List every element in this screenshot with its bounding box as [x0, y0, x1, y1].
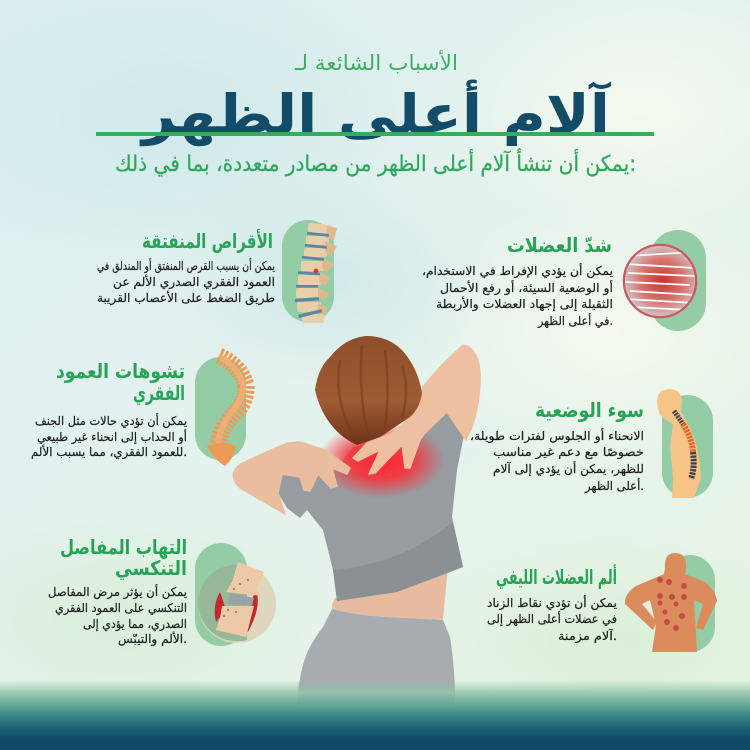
- heading: سوء الوضعية: [535, 398, 644, 422]
- icon: back with trigger points: [625, 553, 717, 652]
- heading: التنكسي: [115, 556, 187, 581]
- heading: التهاب المفاصل: [60, 535, 187, 559]
- body text: [487, 595, 617, 644]
- icon: posture figure: [657, 389, 701, 498]
- body text: الألم والتيبّس.: [118, 631, 187, 647]
- body text: خصوصًا مع دعم غير مناسب: [493, 445, 644, 460]
- body text: طريق الضغط على الأعصاب القريبة: [97, 290, 275, 306]
- body text: الثقيلة إلى إجهاد العضلات والأربطة: [436, 296, 613, 312]
- panel: poor posture: [470, 389, 713, 498]
- shirt shading: [333, 522, 463, 601]
- title underline: [96, 132, 654, 136]
- body text: يمكن أن تؤدي نقاط الزناد: [487, 595, 617, 611]
- icon panel: [650, 230, 706, 331]
- body text: العمود الفقري الصدري الألم عن: [113, 274, 275, 290]
- icon: muscle fibres: [624, 245, 700, 317]
- body text: الانحناء أو الجلوس لفترات طويلة،‏: [470, 428, 644, 444]
- body text: للظهر، يمكن أن يؤدي إلى آلام: [493, 461, 644, 477]
- icon panel: [665, 555, 715, 652]
- body text: التنكسي على العمود الفقري: [55, 601, 187, 616]
- pain glow: [317, 422, 445, 498]
- shirt: [278, 412, 465, 601]
- heading: الفقري: [133, 381, 185, 406]
- body text: يمكن أن تؤدي حالات مثل الجنف: [35, 413, 187, 429]
- panel: fibromyalgia: [487, 553, 717, 652]
- icon panel: [195, 357, 246, 460]
- body text: أو الوضعية السيئة، أو رفع الأحمال: [440, 280, 613, 296]
- body text: [97, 258, 275, 306]
- panel: osteoarthritis: [48, 535, 276, 647]
- panel: muscle strain: [422, 230, 706, 331]
- icon panel: [282, 220, 334, 322]
- body text: يمكن أن يؤثر مرض المفاصل: [48, 584, 187, 600]
- small heading: الأسباب الشائعة لـ: [294, 50, 458, 75]
- hair strands: [338, 345, 406, 435]
- body text: للعمود الفقري، مما يسبب الألم.: [31, 444, 187, 460]
- body text: أو الحداب إلى انحناء غير طبيعي: [37, 429, 187, 445]
- pants: [296, 609, 455, 750]
- raised arm and hand: [353, 345, 480, 474]
- heading: الأقراص المنفتقة: [142, 228, 273, 253]
- body text: في أعلى الظهر.: [537, 313, 613, 329]
- panel: spinal deformities: [31, 356, 246, 466]
- woman photo: [233, 336, 480, 750]
- body text: [48, 584, 187, 647]
- panel: herniated discs: [97, 220, 337, 323]
- body text: في عضلات أعلى الظهر إلى: [487, 611, 617, 627]
- body text: آلام مزمنة.: [558, 628, 617, 644]
- icon: spine with disc: [295, 223, 337, 323]
- heading: ألم العضلات الليفي: [496, 563, 617, 590]
- main title: آلام أعلى الظهر: [139, 79, 612, 146]
- heading: [56, 359, 185, 406]
- body text: [422, 263, 613, 329]
- body text: يمكن أن يؤدي الإفراط في الاستخدام،‏: [422, 263, 613, 279]
- icon panel: [195, 543, 247, 646]
- icon panel: [662, 395, 713, 498]
- heading: شدّ العضلات: [507, 233, 612, 257]
- heading: [60, 535, 187, 581]
- heading: تشوهات العمود: [56, 359, 185, 383]
- bottom gradient band: [0, 680, 750, 750]
- body text: [31, 413, 187, 460]
- body text: يمكن أن يسبب القرص المنفتق أو المندلق في: [97, 258, 275, 274]
- hair: [315, 336, 422, 445]
- bare waist: [332, 566, 448, 620]
- body text: أعلى الظهر.: [584, 478, 644, 494]
- icon: curved spine: [207, 356, 246, 466]
- icon: arthritic joint: [198, 562, 276, 643]
- intro line: يمكن أن تنشأ آلام أعلى الظهر من مصادر متعددة، بما في ذلك:: [115, 148, 636, 177]
- left arm and hand: [233, 442, 350, 514]
- body text: [470, 428, 644, 494]
- body text: الصدري، مما يؤدي إلى: [83, 617, 187, 632]
